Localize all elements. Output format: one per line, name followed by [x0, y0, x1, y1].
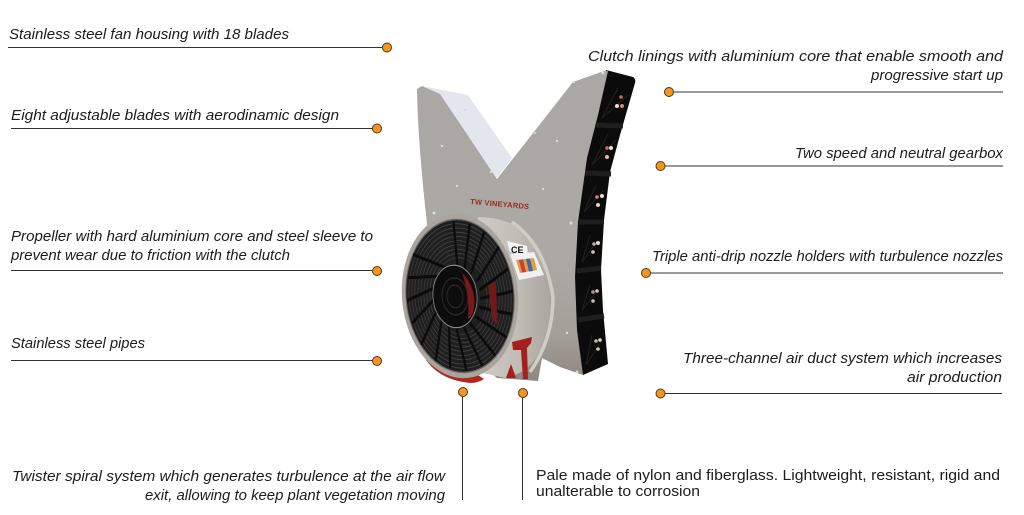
fan blades: [401, 216, 519, 376]
callout: stainless pipes: [11, 335, 382, 366]
CE mark and labels: [507, 241, 544, 280]
callout: clutch linings: progressive start up: [870, 67, 1003, 84]
fan blade fins: [403, 219, 517, 373]
callout: propeller: Propeller with hard aluminium core and steel sleeve to: [11, 228, 373, 245]
callout: air duct: Three-channel air duct system which increases: [683, 350, 1003, 367]
CE mark and labels: CE: [511, 245, 524, 255]
brand label on panel: TW VINEYARDS: [470, 197, 530, 211]
fan: [395, 209, 525, 383]
sprayer fan machine: [395, 70, 635, 383]
red twister spiral: [426, 350, 484, 383]
callout: clutch linings: Clutch linings with aluminium core that enable smooth and: [588, 48, 1004, 65]
callout: propeller: [10, 228, 382, 276]
nozzles: [591, 95, 624, 351]
callout: nozzle holders: Triple anti-drip nozzle holders with turbulence nozzles: [652, 248, 1003, 265]
callout: adjustable blades: [11, 107, 382, 133]
callout: pale: [518, 388, 1000, 500]
callout: clutch linings: [588, 48, 1004, 96]
callout: gearbox: Two speed and neutral gearbox: [795, 145, 1003, 162]
callout: fan housing: [8, 26, 392, 52]
callout: twister spiral: Twister spiral system which generates turbulence at the air flow: [12, 468, 446, 485]
rivets: [432, 72, 604, 374]
callout: stainless pipes: Stainless steel pipes: [11, 335, 145, 352]
callout: twister spiral: exit, allowing to keep plant vegetation moving: [145, 487, 446, 504]
callout: nozzle holders: [642, 248, 1003, 278]
callout: air duct: air production: [907, 369, 1002, 386]
callout: propeller: prevent wear due to friction with the clutch: [10, 247, 290, 264]
red propeller parts: [488, 281, 500, 325]
hub: [430, 263, 480, 329]
callout: gearbox: [656, 145, 1003, 170]
black air duct with nozzles: [570, 70, 635, 375]
callout: twister spiral: [12, 388, 468, 504]
housing cylinder: [470, 217, 553, 378]
callout: pale: Pale made of nylon and fiberglass. Lightweight, resistant, rigid and: [536, 467, 1000, 484]
white inner panel: [422, 86, 512, 178]
stainless steel panel: [417, 71, 608, 381]
callout: pale: unalterable to corrosion: [536, 483, 700, 500]
red support bracket: [506, 337, 532, 379]
callout: adjustable blades: Eight adjustable blades with aerodinamic design: [11, 107, 339, 124]
callout: air duct: [656, 350, 1003, 398]
callout: fan housing: Stainless steel fan housing with 18 blades: [9, 26, 289, 43]
